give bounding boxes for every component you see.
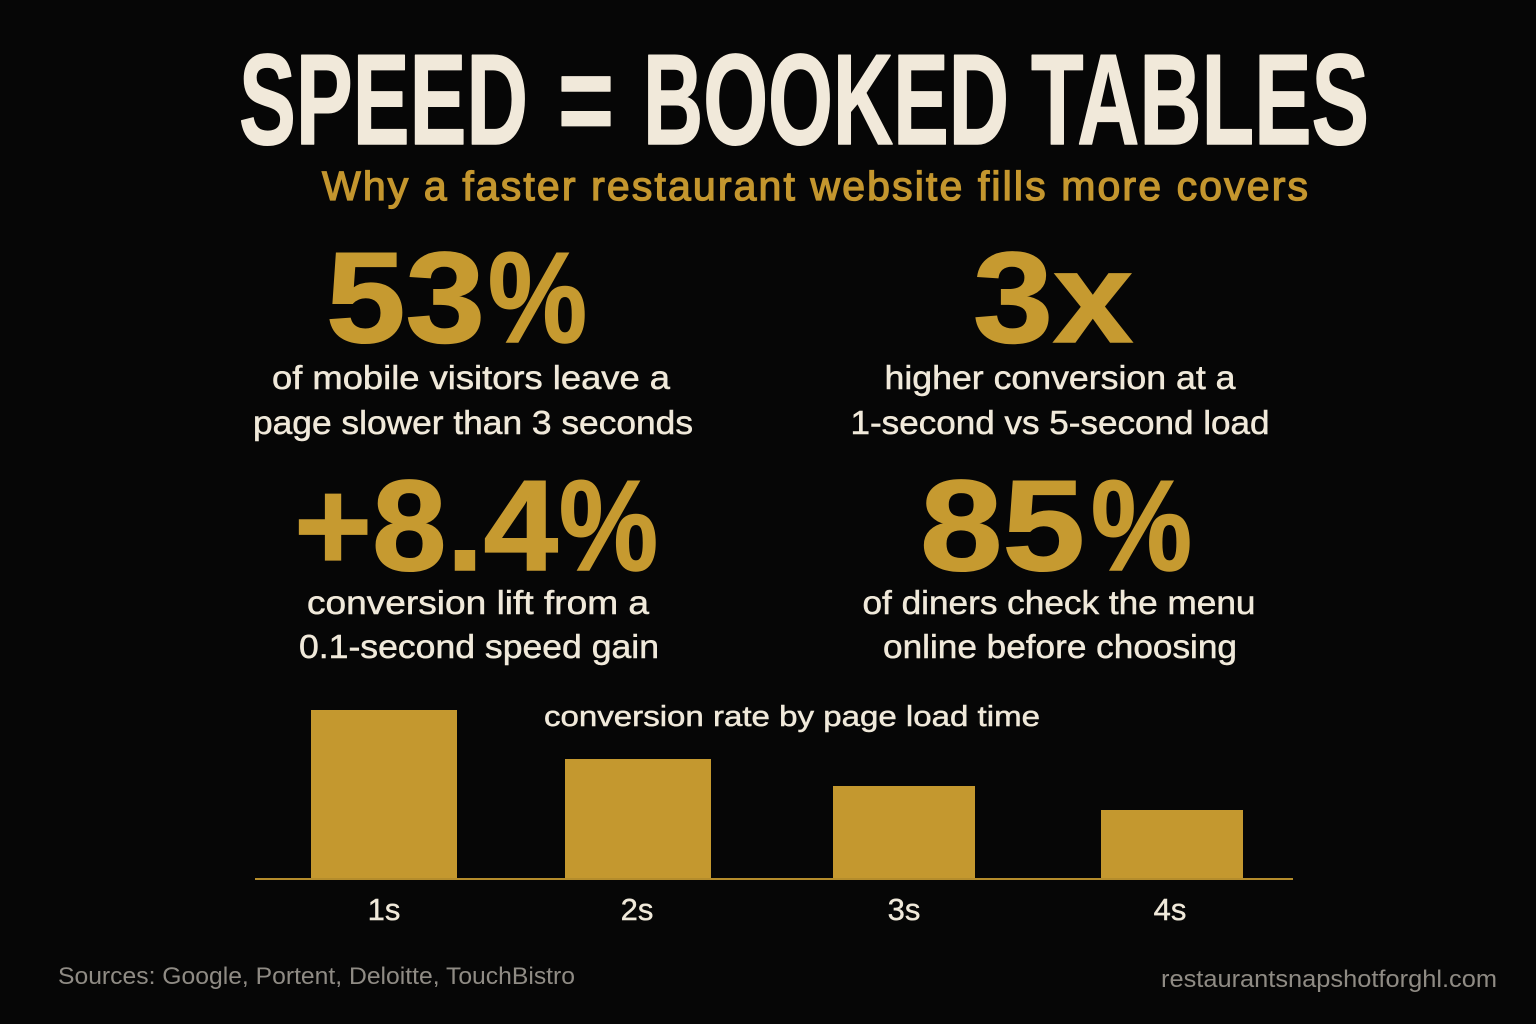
stat: 53%: % bbox=[488, 226, 587, 370]
bar: 2s bbox=[565, 759, 711, 879]
title: TABLES bbox=[1031, 28, 1369, 172]
stat: +8.4%: +8.4 bbox=[294, 454, 558, 598]
stat: 85%: online before choosing bbox=[883, 628, 1237, 665]
chart title: conversion rate by page load time bbox=[544, 701, 1040, 733]
stat: +8.4%: 0.1-second speed gain bbox=[299, 628, 659, 665]
bar: 3s bbox=[833, 786, 975, 879]
stat: 3x bbox=[850, 226, 1270, 441]
label: 3s: 3s bbox=[888, 892, 920, 927]
website url: restaurantsnapshotforghl.com bbox=[1161, 966, 1497, 993]
label: 1s: 1s bbox=[368, 892, 400, 927]
stat: 85%: of diners check the menu bbox=[862, 584, 1256, 621]
axis line bbox=[255, 878, 1293, 880]
stat: 3x: 1-second vs 5-second load bbox=[850, 404, 1270, 441]
sources note: Sources: Google, Portent, Deloitte, TouchBistro bbox=[58, 963, 575, 990]
subtitle: Why a faster restaurant website fills more covers bbox=[322, 163, 1308, 209]
label: 4s: 4s bbox=[1154, 892, 1186, 927]
stat: 85% bbox=[862, 454, 1256, 665]
stat: 53%: of mobile visitors leave a bbox=[272, 359, 671, 396]
title: = bbox=[558, 28, 614, 172]
stat: +8.4%: conversion lift from a bbox=[307, 584, 650, 621]
bar: 1s bbox=[311, 710, 457, 879]
stat: 85%: 85 bbox=[920, 454, 1085, 598]
stat: 3x: 3x bbox=[973, 226, 1133, 370]
stat: +8.4%: % bbox=[559, 454, 658, 598]
stat: 53%: 53 bbox=[326, 226, 485, 370]
stat: 3x: higher conversion at a bbox=[884, 359, 1236, 396]
label: 2s: 2s bbox=[621, 892, 653, 927]
stat: 53%: page slower than 3 seconds bbox=[253, 404, 693, 441]
stat: 53% bbox=[253, 226, 693, 441]
stat: 85%: % bbox=[1091, 454, 1192, 598]
title: BOOKED bbox=[643, 28, 1009, 172]
bar: 4s bbox=[1101, 810, 1243, 879]
stat: +8.4% bbox=[294, 454, 659, 665]
title bbox=[239, 28, 1369, 172]
title: SPEED bbox=[239, 28, 528, 172]
bar chart: conversion rate by page load time bbox=[255, 701, 1293, 927]
